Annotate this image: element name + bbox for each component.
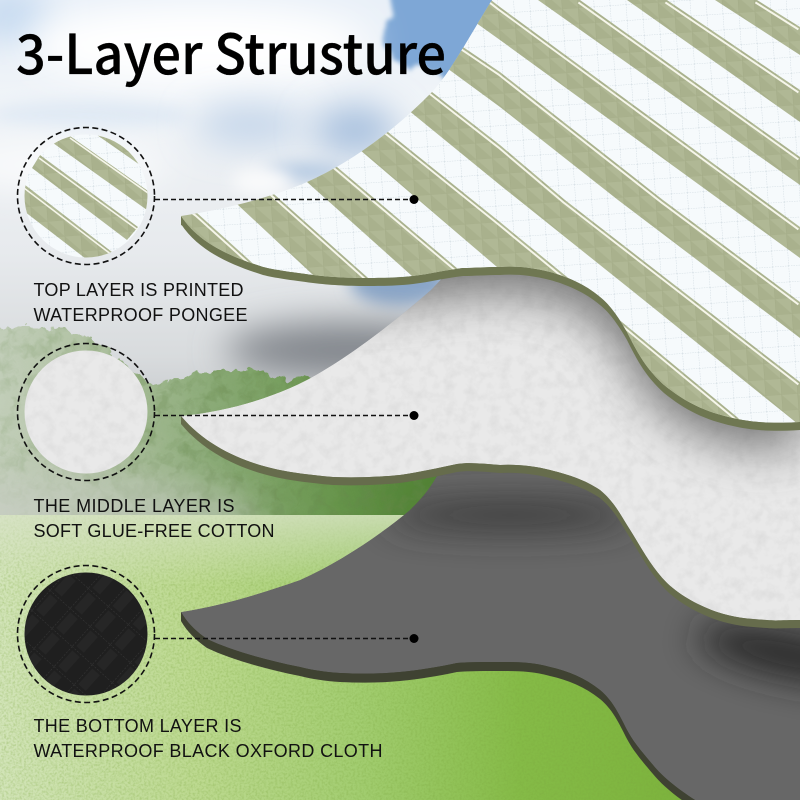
caption: THE MIDDLE LAYER IS [34, 496, 234, 516]
leader dot [410, 634, 418, 643]
leader line [155, 638, 414, 640]
caption [34, 716, 382, 761]
top layer surface with stripes [170, 0, 800, 460]
bottom layer surface [181, 465, 800, 800]
callout: bottom layer [18, 566, 418, 761]
top layer edge thickness [181, 8, 800, 431]
heading: 3-Layer Strusture [16, 10, 446, 90]
swatch: soft cotton [24, 350, 148, 474]
background: sky with clouds [0, 0, 800, 420]
leader dot [410, 411, 418, 420]
leader line [155, 414, 414, 416]
leader dot [410, 195, 418, 204]
caption: TOP LAYER IS PRINTED [34, 280, 244, 300]
dashed ring [18, 566, 154, 702]
cream pinstripes [188, 0, 798, 442]
layer: bottom black oxford cloth [181, 465, 800, 800]
callout: top layer [18, 120, 418, 325]
green stripes [170, 0, 800, 460]
dashed ring [18, 128, 154, 264]
caption: WATERPROOF BLACK OXFORD CLOTH [34, 741, 382, 761]
background: tree line [0, 323, 437, 515]
caption [34, 496, 274, 541]
caption: SOFT GLUE-FREE COTTON [34, 521, 274, 541]
layer: middle cotton [181, 274, 800, 628]
middle layer surface [181, 274, 800, 620]
bottom layer edge thickness [181, 474, 800, 800]
callout: middle layer [18, 344, 418, 541]
swatch: printed pongee [24, 134, 148, 258]
caption: THE BOTTOM LAYER IS [34, 716, 242, 736]
middle layer edge thickness [181, 278, 800, 628]
layer: top printed pongee [170, 0, 800, 460]
caption: WATERPROOF PONGEE [34, 305, 248, 325]
caption [34, 280, 248, 325]
dashed ring [18, 344, 154, 480]
background: lawn [0, 515, 800, 800]
swatch: black oxford [24, 572, 148, 696]
leader line [155, 198, 414, 200]
